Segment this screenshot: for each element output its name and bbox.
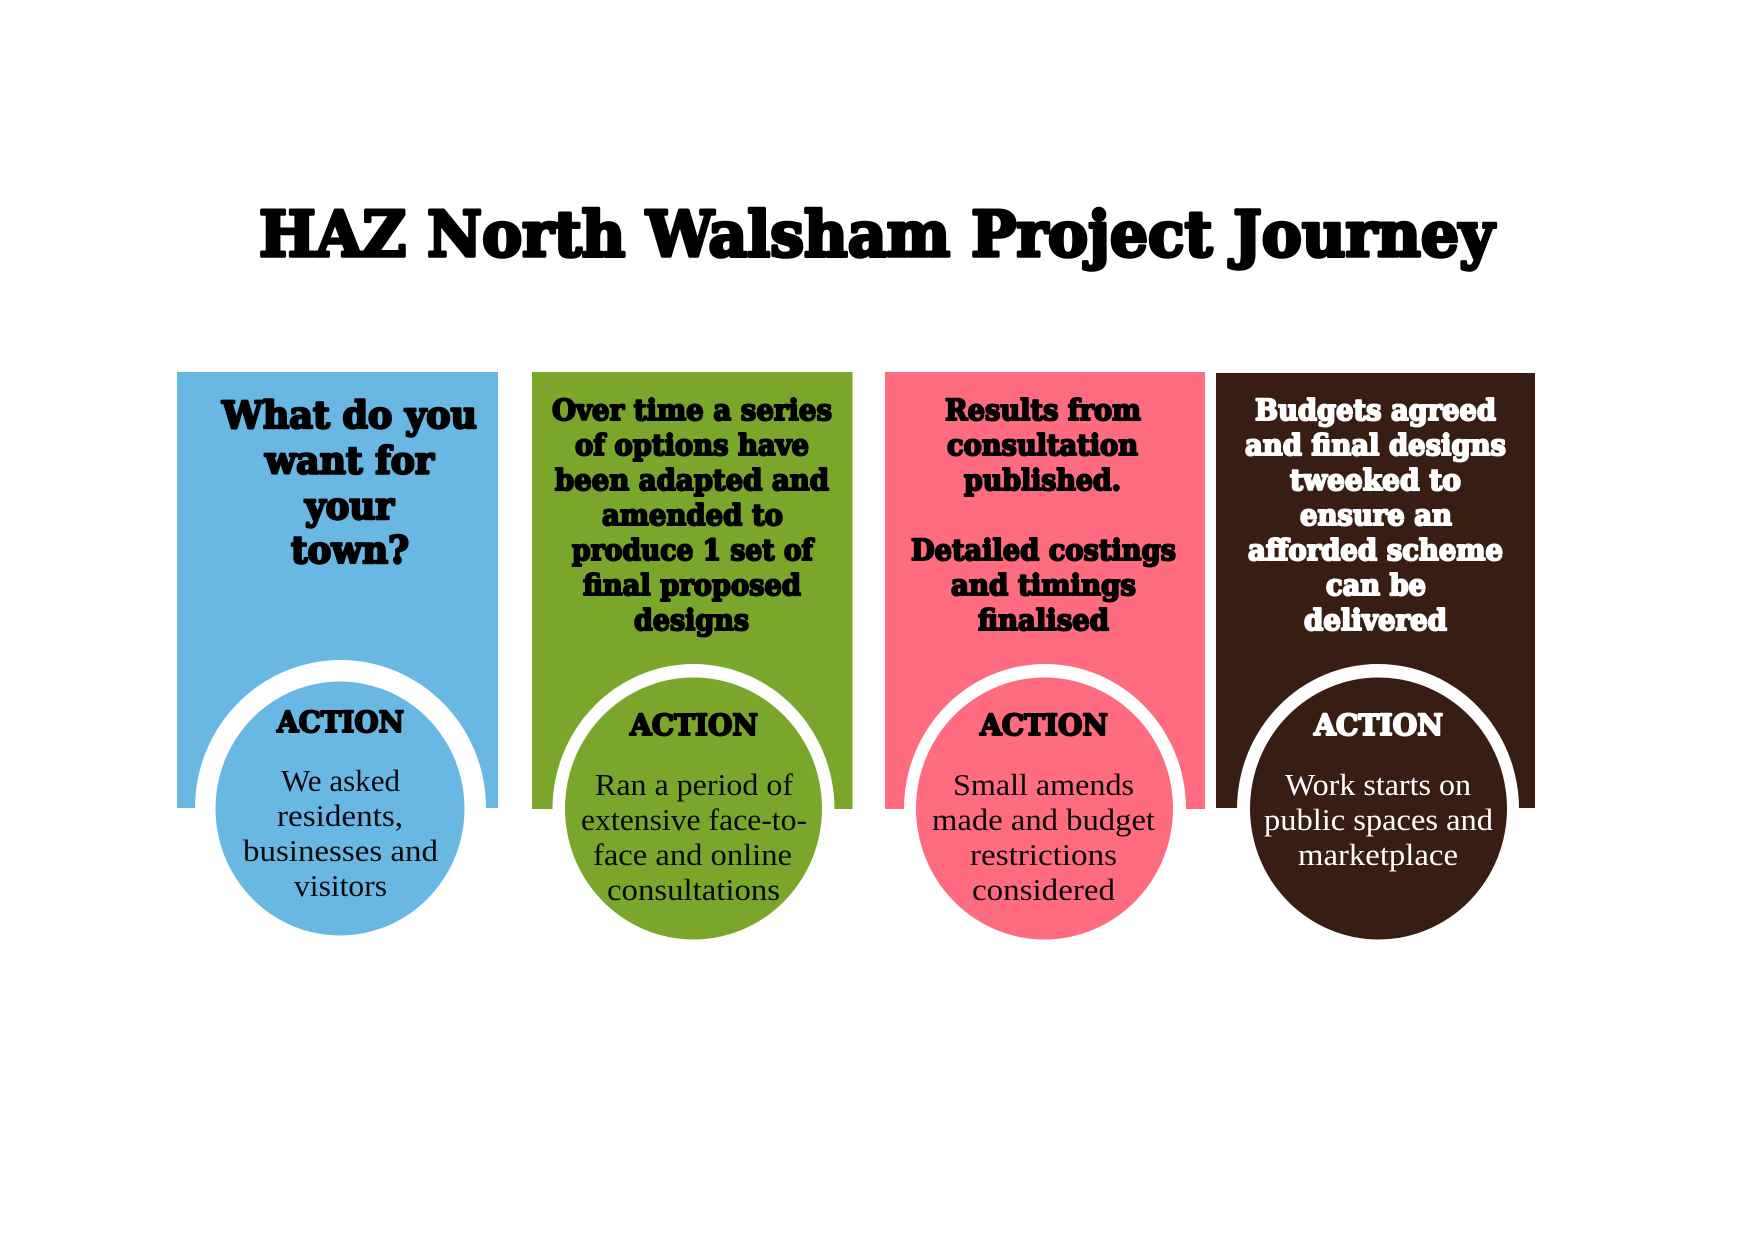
panel 3 heading: Results from (945, 393, 1141, 427)
panel 1 white ring (195, 660, 486, 956)
panel 3 heading: and timings (951, 568, 1136, 602)
panel 3 action text: made and budget (932, 802, 1155, 837)
panel 3 heading: Detailed costings (911, 533, 1176, 567)
panel 2 heading: of options have (575, 428, 809, 462)
panel 1 heading: What do you (221, 393, 477, 437)
panel 4 action label: ACTION (1313, 708, 1443, 742)
panel 4 action circle (1250, 678, 1507, 940)
panel 4 action text: Work starts on (1285, 767, 1472, 802)
panel: results published (885, 372, 1205, 954)
panel 2 heading (552, 393, 832, 637)
panel 3 white ring (904, 664, 1186, 954)
panel 1 heading: want for (264, 438, 434, 482)
panel 4 heading (1245, 393, 1506, 637)
panel 1 action circle (216, 682, 464, 936)
panel: options adapted (532, 372, 852, 954)
panel 4 heading: Budgets agreed (1255, 393, 1496, 427)
panel 2 action text: consultations (607, 872, 780, 907)
panel 4 heading: and final designs (1245, 428, 1506, 462)
panel 2 heading: designs (634, 603, 749, 637)
panel 4 action text (1264, 767, 1494, 872)
panel 3 heading (911, 393, 1176, 637)
panel 4 heading: tweeked to (1290, 463, 1461, 497)
panel 1 background (177, 372, 498, 808)
panel 2 white ring (552, 664, 834, 954)
panel 2 action text: Ran a period of (595, 767, 794, 802)
panel 1 action label: ACTION (276, 705, 404, 739)
panel 2 background (532, 372, 852, 809)
panel 2 action label: ACTION (629, 708, 758, 742)
panel 2 action text: extensive face-to- (581, 802, 807, 837)
panel 3 action text (932, 767, 1155, 907)
panel 2 heading: final proposed (583, 568, 801, 602)
panel 3 action circle (916, 678, 1173, 940)
panel 2 action text: face and online (593, 837, 792, 872)
panel 2 action circle (565, 678, 822, 940)
panel 4 background (1216, 373, 1535, 808)
panel 3 action text: restrictions (970, 837, 1117, 872)
panel 1 action text: visitors (294, 868, 387, 903)
panel 4 white ring (1237, 664, 1519, 954)
panel 3 action text: Small amends (953, 767, 1134, 802)
panel 3 background (885, 372, 1205, 809)
panel 1 action text (243, 763, 439, 903)
panel 2 heading: Over time a series (552, 393, 832, 427)
panel 4 heading: can be (1326, 568, 1426, 602)
panel 1 action text: residents, (277, 798, 403, 833)
panel 4 action text: public spaces and (1264, 802, 1494, 837)
panel 1 action text: We asked (281, 763, 400, 798)
panel 3 action label: ACTION (979, 708, 1108, 742)
panel 1 heading: your (304, 484, 394, 528)
panel 4 heading: delivered (1304, 603, 1447, 637)
panel 2 action text (581, 767, 807, 907)
panel 2 heading: been adapted and (555, 463, 829, 497)
panel 3 heading: published. (964, 463, 1121, 497)
panel 3 heading: consultation (947, 428, 1138, 462)
panel 1 heading (221, 393, 477, 572)
panel 4 heading: ensure an (1300, 498, 1452, 532)
panel 2 heading: produce 1 set of (572, 533, 815, 567)
panel: what do you want (177, 372, 498, 956)
panel 4 heading: afforded scheme (1248, 533, 1503, 567)
panel 3 action text: considered (972, 872, 1116, 907)
panel 1 heading: town? (291, 528, 409, 572)
title: HAZ North Walsham Project Journey (259, 197, 1496, 271)
panel 3 heading: finalised (978, 603, 1109, 637)
panel 1 action text: businesses and (243, 833, 439, 868)
panel 2 heading: amended to (602, 498, 783, 532)
panel: budgets agreed (1216, 373, 1535, 954)
panel 4 action text: marketplace (1298, 837, 1458, 872)
